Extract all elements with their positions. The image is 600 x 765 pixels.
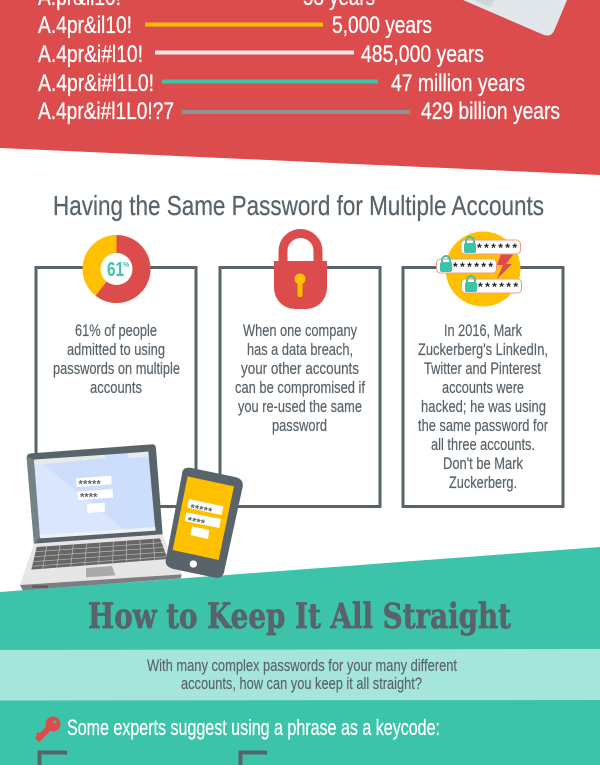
- illustration: laptop: *****: [79, 479, 102, 491]
- text: card 3: Zuckerberg's LinkedIn,: [418, 341, 548, 359]
- panel: password strength: [0, 0, 600, 175]
- bracket: left example: [40, 752, 67, 765]
- text: card 1: [53, 322, 180, 397]
- row: 429 billion years: 429 billion years: [421, 98, 560, 125]
- text: card 2: you re-used the same: [238, 398, 362, 416]
- chart: 61 percent donut: [82, 235, 151, 303]
- illustration: phone: [166, 468, 243, 578]
- text: card 2: When one company: [243, 322, 358, 340]
- text: card 3: Twitter and Pinterest: [424, 360, 541, 378]
- panel: card 2: [220, 234, 380, 506]
- illustration: phone: *****: [189, 502, 214, 518]
- illustration: laptop: ****: [80, 491, 98, 503]
- text: card 1: accounts: [90, 379, 142, 397]
- row: 47 million years: 47 million years: [391, 70, 525, 97]
- text: keycode tip: Some experts suggest using a phrase as a keycode:: [67, 715, 440, 740]
- text: card 3: In 2016, Mark: [444, 322, 523, 340]
- text: card 3: all three accounts.: [431, 436, 535, 454]
- chart: 61 percent donut: %: [123, 262, 130, 269]
- icon: keyboard corner: [463, 0, 567, 36]
- text: card 1: admitted to using: [67, 341, 165, 359]
- row: 10 character password: [38, 0, 375, 11]
- bracket: right example: [240, 752, 267, 765]
- illustration: phone: ****: [186, 515, 206, 530]
- text: card 2: password: [272, 417, 327, 435]
- password field 1: ******: [477, 241, 517, 255]
- row: 5,000 years: A.4pr&il10!: [38, 12, 132, 39]
- band: question: accounts, how can you keep it all straight?: [181, 674, 422, 693]
- row: 485,000 years: A.4pr&i#l10!: [38, 41, 143, 68]
- chart: 61 percent donut: 61: [107, 259, 124, 281]
- row: 5,000 years: 5,000 years: [332, 12, 432, 39]
- row: 47 million years: A.4pr&i#l1L0!: [38, 70, 154, 97]
- illustration: laptop: [20, 444, 182, 590]
- panel: card 1: [36, 235, 196, 506]
- text: card 3: the same password for: [418, 417, 548, 435]
- text: card 1: 61% of people: [75, 322, 157, 340]
- text: card 2: has a data breach,: [247, 341, 353, 359]
- password field 2: ******: [453, 260, 493, 274]
- text: card 2: can be compromised if: [235, 379, 365, 397]
- panel: card 3: [403, 232, 563, 506]
- text: card 3: accounts were: [442, 379, 524, 397]
- row: 485,000 years: [38, 41, 484, 68]
- icon: reused passwords: [436, 232, 522, 306]
- icon: padlock: [274, 234, 327, 309]
- panel: keep it straight: [0, 547, 600, 765]
- text: card 3: hacked; he was using: [421, 398, 546, 416]
- icon: key: [37, 716, 60, 740]
- password field 3: ******: [478, 280, 518, 294]
- text: card 3: Zuckerberg.: [449, 474, 517, 492]
- text: card 3: Don't be Mark: [443, 455, 524, 473]
- text: card 2: your other accounts: [241, 360, 359, 378]
- band: question: [0, 649, 600, 700]
- row: 429 billion years: [38, 98, 560, 125]
- band: question: With many complex passwords for your many different: [147, 656, 457, 675]
- row: 485,000 years: 485,000 years: [361, 41, 484, 68]
- text: card 3: [418, 322, 548, 492]
- row: 429 billion years: A.4pr&i#l1L0!?7: [38, 98, 174, 125]
- row: 5,000 years: [38, 12, 432, 39]
- text: card 2: [235, 322, 365, 435]
- row: 47 million years: [38, 70, 525, 97]
- text: card 1: passwords on multiple: [53, 360, 180, 378]
